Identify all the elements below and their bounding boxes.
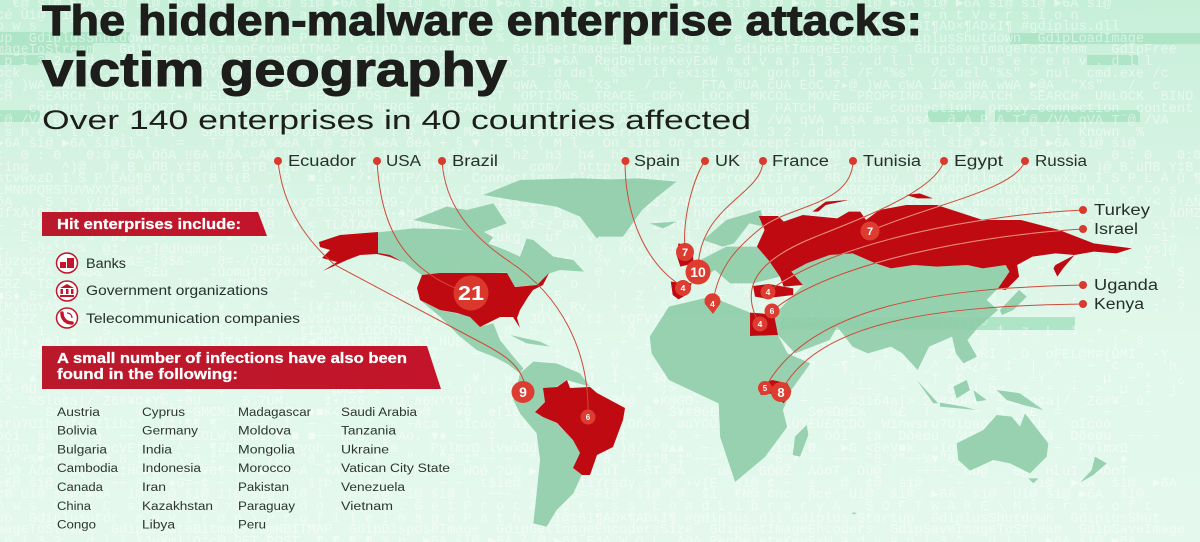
background: scrolling malware code pattern: : 0 : 0 0:0 6A ÓõA ‼6A ÞõA …A@ ‼+A br hr tr td div h1 h2 h3 h4 h5 h6 li script nbsp: @@ B /@B Authorization Basic 0 : 0 0:0 <box>0 148 1200 164</box>
background: scrolling malware code pattern: ¯Ë¸¸ ,, ¤ ∂S ÷ ¨ ;¥= ^+ _] ."+ $1 I ‡ pj tiukg uf ·v ¿0 ˜· l £= * Q ;, ~: ¤ ˙ ♦ m W ,, ^% ë "¯ :6 | =1+ <box>0 231 1177 246</box>
title <box>42 0 922 97</box>
connector lines from country labels to markers <box>278 161 1083 417</box>
list: other countries with infections: Moldova <box>238 426 292 438</box>
banner: hit enterprises include <box>42 212 267 236</box>
list: other countries with infections: Libya <box>142 520 176 532</box>
marker: Ecuador 9 <box>512 381 534 403</box>
country labels with dots: France <box>772 153 829 170</box>
marker: Uganda 5: 5 <box>763 384 768 393</box>
background: scrolling malware code pattern: up Gdiplusutdr e n v i r o n \ P r o f i l e I m a g e P a t h t6I@t6I¶AD×¶ADxI¶ #gdiplus.dll Gdiplus Startup GdiplusShutdown GdiplusShut <box>0 512 1161 527</box>
list: hit enterprise types <box>56 253 300 328</box>
icon: telephone <box>56 308 78 328</box>
country labels with dots: Israel <box>1094 221 1138 238</box>
background: scrolling malware code pattern: ÕO ÄÇFÂ $%$& ¯S£ü ‡ûomqjbryoou < ·· °°. !# pj tiuk , ; 0 +/- @ ¨ Y ^ }{ W ¦ * : ~ l¨ / | ¯ ? ., == << $ <box>0 265 1185 281</box>
label: government organizations: Government organizations <box>86 283 268 298</box>
list: other countries with infections: Vatican City State <box>341 463 450 475</box>
background: scrolling malware code pattern: ym(!_1 ‡¨ 'S¸ _‡` ¸¨÷‡¨ ,- tIJ0yl^iÖDCRCE_M ¨ > @ ½ W ¨ ¸ Q @ = .< $¥♦ |)♦ yml÷▼ drql+b ÕcÁIÍ ‡ z L ‡ + ÷ <box>0 324 1128 340</box>
country labels with dots: UK <box>715 153 741 170</box>
list: other countries with infections: Indonesia <box>142 463 202 475</box>
background: scrolling malware code pattern: p i 3 2 . d l l ïJu¥ml'O‡ç@ GET POST ¶ ¶ ¶ ¶ % p ►6A ši@ ►6A ši@ ►6A RegDeleteKeyExW a d v a p i 3 2 . d l l o u t U s e r e n v . d l l <box>0 55 1152 70</box>
background: scrolling malware code pattern: +, »ó±*|°% @‡ vs]@dhqmgok ΩXHF\HH A Wf¶ ~¶ Ò1/ n$3 ¯É¸÷ )!;Q @kx §± 7vR =u# ^;/ dp0 +H ¿W .e _m4 %, »ó±*|°% @‡ vs]@ <box>0 242 1177 258</box>
background: scrolling malware code pattern: LMNOPQRSTUVWXYZa@B M i c r o s o f t E n h a n c e d C r y p t o g r a p h i c P r o v i d e r ABCDEFGHIJKLMNOPQRSTUVWXYZa@B M i c r o s <box>0 184 1177 199</box>
background: scrolling malware code pattern: -%-ñU ¸ -¢ ÷ _ ■ ‡ ÷ % ¨ µAZ◆!t ÷÷ ^ Ò.e|-by ◦ ° • ¦ ÷ ;> ¸¸ ‡ % , . - _÷÷_ ÷ * 0.e|-by ÷ ¨÷ + > µ ‡ j <box>0 382 1177 398</box>
banner: small number of infections: found in the following: <box>57 367 238 383</box>
country labels with dots: Russia <box>1035 153 1087 170</box>
list: other countries with infections: Iran <box>142 482 166 494</box>
background: scrolling malware code pattern: _ü@ ÁôoT ÓQ÷ ‡0‡HC►Ü ♦v-¥0¶÷♦ ▲÷¶♥÷A ¥A÷s$C InIME÷B WOǿ ?ü@ ▶LVü@ HLuI ÷õT @Á ¯ü@ ¯GÖ@Z ÁôoT Óü@ ÷÷÷÷ üÖ@ Θ@ HLuI ÁôoT <box>0 464 1128 480</box>
country labels with dots: Ecuador <box>288 153 356 170</box>
list: other countries with infections: Cyprus <box>142 407 185 419</box>
background: scrolling malware code pattern: ock userenv.dll CreateEnvironmentBlock DestroyEnvironmentBlock :d del "%s" if exist "%s" goto d del /F "%s" /c del "%s" > nul cmd.exe /c <box>0 67 1169 82</box>
marker: USA 21 <box>454 276 488 310</box>
list: other countries with infections: Saudi Arabia <box>341 407 418 419</box>
list: other countries with infections: Bolivia <box>57 426 98 438</box>
connector lines: pale sections crossing Russia <box>763 206 1062 290</box>
marker: Kenya 8 <box>771 382 791 402</box>
list: other countries with infections: Tanzania <box>341 426 397 438</box>
unaffected landmass <box>378 178 1107 527</box>
background: scrolling malware code pattern: sru?Uibaofe7Zlibz"¯ (‡!¶¶ ¶¨ ÷.÷÷ ¸‡ ÷. ~ ° ~ ÷áca oÏcóò âí¶A ¸ ÷ CDñ×0 øuÝÖÛñÂ-óÛÒÕ‡iÜÝ£Ü£GÇDÖ Winwsru?Uibaofe7Zlib oÏcóò <box>0 417 1111 433</box>
country labels with dots: Tunisia <box>863 153 921 170</box>
icon: banks <box>56 253 78 273</box>
list: other countries with infections: Cambodia <box>57 463 119 475</box>
background: scrolling malware code pattern: ¦|)♦ yml÷▼ drql+b ¢oÀIÍÁTaÍ↓ )`cf◄QHFUYOJPI/NLKI_HUB ÷÷] K ÷ ÷ = ÷ ‡ % .5< oFEL@H#{ΩMI -YSJ + ; l @ ! ¨ ¸ ~ ¦ § <box>0 335 1144 351</box>
background: scrolling malware code pattern: content len REPORT MKACTIVITY CHECKOUT MERGE M-SEARCH NOTIFY SUBSCRIBE UNSUBSCRIBE PATCH PURGE connection proxy-connection content leng <box>0 102 1200 117</box>
marker: Tunisia 4: 4 <box>710 299 715 309</box>
marker: Spain 4 <box>675 280 691 296</box>
background: scrolling malware code pattern: òói §ä ô a ÷÷ :RPINLKOLW\ OWI ■0■ ■÷÷÷ñôG ó Ao. ▼♦ ÷÷ ‡ ¸ % ¥ << ¨‡ ÷ õ ÷ ¨ Vo ¸ ÷ òói ‡ä Dôeøu óÛ% òói §ä Dôeøu ÷÷ ÷ <box>0 429 1161 445</box>
country labels with dots: Spain <box>634 153 680 170</box>
marker: Tunisia 4 <box>704 293 720 314</box>
oceania and southeast asia islands <box>793 380 1107 515</box>
marker: Brazil 6 <box>580 410 596 424</box>
background: scrolling malware code pattern: ▸@ )WA cWA iWA qWA wWA @A ŒA FTA @UA cUA ÉöC 7▸@ )WA cWA iWA qWA @A "Xs" / c FTA @UA cUA ÉöC 7▸@ )WA cWA iWA qWA wWA ►@A "Xs" / c <box>0 78 1161 94</box>
marker: France 10: 10 <box>690 264 706 280</box>
country labels with dots: Brazil <box>452 153 498 170</box>
background: scrolling malware code pattern: mageToStream GdipCreateBitmapFromHBITMAP GdipDisposeImage GdipGetImageEncodersSize GdipGetImageEncoders GdipSaveImageToStream GdipSaveImage <box>0 523 1185 538</box>
background: scrolling malware code pattern: stvwxzD I S P LÀû¶B Ç(B x(B ë(B ˜)B ■↓B ▪/• HTTP/1.1 Connection: Close Host: GetProductInfo 8B aeiouy bcdfghjklmnpqrstvwxzD I S P L À û ¶ B <box>0 171 1200 187</box>
background: scrolling malware code pattern: ¨@ /VA qVA æsA æsA úsA ∂„A P„A T¨@ /VA qVA T¨@ /VA qVA æsA æsA úsA ∂„A P„A T¨@ /VA qVA T¨@ /VA qVA æsA æsA úsA ∂„A P„A T¨@ /VA qVA T¨@ /VA <box>0 114 1170 129</box>
background: scrolling malware code pattern: ¶ ~ ÷ ‡ ¨¨ , ° ¢ ! ^ ‡ ÷ ; ▼ ‹; ÷ ¦ ~ €%†|A » y ‡ . ¢ë : ‡ . f¶ ~¶ ñ @ ^ µA¿e ‡ | ^ ÷ ¢ ¤ 'h <box>0 360 1177 375</box>
background: scrolling malware code pattern: ring ^)@ )@ B ûΠB Y‡B ‼†B B†B B‡B ;†B ;†B - http://www. com/ http://www GET / HTTP/1.1 User-Agent: Mozilla/5.0 www ^)@ )@ B ûΠB Y‡B ‼ <box>0 161 1200 176</box>
marker: Turkey 4 <box>760 284 776 300</box>
list: other countries with infections: China <box>57 501 92 513</box>
marker: UK 7 <box>676 243 694 261</box>
list: other countries with infections: Bulgaria <box>57 444 108 456</box>
marker: Brazil 6: 6 <box>586 413 591 422</box>
banner: small number of infections <box>42 346 441 389</box>
background: scrolling malware code pattern: cé Ui@ ši@ ►6A M ¸ì@ i e I m a g e P a t h S O F T W A R E \ M i c r o s o f t \ W i n d o w s N T \ C u r r e n t V e r s i o n <box>0 9 1079 24</box>
marker: Egypt 4 <box>752 316 768 332</box>
affected countries: Alaska, USA, Brazil <box>319 232 625 475</box>
country labels with dots: Turkey <box>1094 202 1150 219</box>
marker: Turkey 4: 4 <box>766 287 771 297</box>
banner: small number of infections: A small number of infections have also been <box>57 351 407 367</box>
background: scrolling malware code pattern: çØ Ui@ ši@ ►6A i@ ó↓@ ši@ 1†@ ši@ ši@ l ¡A i@ ši@ ši@ l ÷÷÷ ši@ ♦G=÷Fi@ ši@ ¸@ ši €N@ ¢nc βcé Ui@ ši@ ►6A ši@ Ui@ ši@ ►6A ši@ <box>0 488 1144 503</box>
list: other countries with infections: Morocco <box>238 463 291 475</box>
label: telecommunication companies: Telecommunication companies <box>86 311 300 326</box>
background: scrolling malware code pattern: óA 5 Y< ÿ!ΔÑ defghijklmnopqrstuvwxyz0123456789-/ [$$$]rs ‡$$$$$%$$$XYZ[$$$$$$:?ABCDEFIJKLMNOPQRSTUVWXYZ 5 Y< ÿ!ΔÑ abcdefghijklmnopq 5 Y< ÿ!ΔÑ <box>0 195 1200 211</box>
list: other countries with infections: Ukraine <box>341 444 389 456</box>
list: other countries with infections <box>57 407 450 532</box>
country labels with dots: Egypt <box>954 153 1004 170</box>
list: other countries with infections: Venezuela <box>341 482 406 494</box>
country labels with dots: USA <box>386 153 422 170</box>
background: scrolling malware code pattern: CH SEARCH UNLOCK 7▸@ DELETE GET HEAD POST PUT CONNECT OPTIONS TRACE COPY LOCK MKCOL MOVE PROPFIND PROPPATCH SEARCH UNLOCK BIND <box>0 90 1193 105</box>
background: scrolling malware code pattern: o w s N T \ C u r r e n t V e r s i o n \ P r o f i l e L i s t % s \ P r o f i l e I m a g e P a t h t6I@t6I¶AD×¶ADxI¶ #gdiplus.dll <box>0 20 1120 35</box>
marker: France 10 <box>686 260 710 284</box>
list: other countries with infections: Peru <box>238 520 266 532</box>
background: scrolling malware code pattern: —* %Slo¢a|/ Z6#¥O♦Y‰,+0U 6.7UM. ‡•|X6. 1 a6NYYUI µAZ¢!Ü"¯‡V @@@ ♦K@GO- -SLPNI ÷ = %3164a|> 20#4µA♦ ÷%Slo¢a|/ Z6#¥ 0. <box>0 395 1152 410</box>
background: scrolling malware code pattern: €¥ ▲ _ ~ ' . ¿ ; ¨ ° µ = Ö ¦ = ‡ ¸ ¥ WJELS Ä J ‡ ÷ $¢ d wÑh2s .. !¨ ;; = ¯† ¢ ≈ ÷Y¨ . µ ÷ * ¿ <box>0 371 1185 387</box>
marker: UK 7: 7 <box>682 247 688 259</box>
marker: Ecuador 9: 9 <box>519 384 527 400</box>
country labels with dots: Uganda <box>1094 277 1158 294</box>
marker: Russia 7: 7 <box>867 226 873 238</box>
background: scrolling malware code pattern: oFEL@H#{ΩMI -Y<d÷xS ¯Y¢× !† IØ♦ ‡Ä÷C> ¶8%‡ Z` ÷ ? - ‡ 1 @ ¯ ‡ -0÷ ; ¿ L@B$ ¨ ‡ ‡ ¶ Z PWRI _D oFEL@H#{ΩMI -Y <box>0 348 1169 363</box>
list: other countries with infections: Pakistan <box>238 482 289 494</box>
background: scrolling malware code pattern: ►6A ši@ ►6A ši@ïl l = T¨@ zëA %éA T¨@ zëA %éA 0éA + § ▼ ! S : ( M l On site On site Accept-Language: Accept: ši@ ►6A ši@ ►6A ši@ ši@ <box>0 137 1136 152</box>
list: other countries with infections: Paraguay <box>238 501 295 513</box>
subtitle: Over 140 enterprises in 40 countries affected <box>42 105 751 135</box>
background: scrolling malware code pattern: ■S♦ 5+ ■ ... q; ¿¸¸%· ¨°÷·*%¨¯ ‡ = "· ♦WSUH■÷JT&÷AˆZ/♦ ˆ5 ◦ ! Z kq S÷ ^^ ♠ | ¯ < 5 7 ; @ % ; . - ¨ , <box>0 290 1169 305</box>
background: scrolling malware code pattern: — +C@ ◄ ∙ Hit =9¥ ;%^÷0 -8B ▼ < TLÄTAÅL.!/Th-J_R¶H+Y$. %f~z_8A j!@#$ zVxQ!1 *z© +nt 4!H-G _ ¦† ^4+; m-&% *v #z< :7 k_Q xL! ..= <box>0 219 1200 234</box>
background: scrolling malware code pattern: ÷€@ ši@ ÷ ¢ ÷÷ ši@ ♦G=÷¢ ÷ ÷ ÷ -ü 1†Þ ši@ +÷ ¨ ÷ ÷ t$ie@ ÷÷ "liYrsdy.s 9@ +v{E ši@ ¢ ÷ ± ¸@ ¢@ ši@ ¯÷ ¨ ÷ ši@ ►6A ši@ ►6A <box>0 477 1178 492</box>
background: scrolling malware code pattern: JfXÅ!ÕD◄ R áOMZ áOMZ NuB CvB CvB Hv@ ° ?cyKm=S-♣hU Qu +BcE<3@ % B z$@ +$@ * @ hNPvB nK5HY vB1- BS‡B T Fv %& JfXÅ!ÕD◄ R áOMZ ÿ áOMZ <box>0 206 1200 222</box>
marker: Egypt 4: 4 <box>758 319 763 329</box>
list: other countries with infections: Madagascar <box>238 407 311 419</box>
world map <box>319 178 1132 527</box>
icon: government building <box>56 281 78 301</box>
background: scrolling malware code pattern: »ion Ø ÷ ÷ ÍocVEflst ^ ÷ ¶ZBZ aüqzvoh lasirla PylmxΩ lvwxΩd ¢ %1.3‡-)8/ 9▲▲ ÷ ‡ »ion Ø ►G <8eV■k »ion Ø ÷ ¶ ÷ PylmxΩ <box>0 441 1128 457</box>
background: scrolling malware code pattern: mageToStream GdipCreateBitmapFromHBITMAP GdipDisposeImage GdipGetImageEncodersSize GdipGetImageEncoders GdipSaveImageToStream GdipFree <box>0 43 1177 58</box>
marker: Spain 4: 4 <box>681 283 686 293</box>
background: scrolling malware code pattern: ˜˜ Se%Ω@£% ¼£ Θl÷GMCMLHJ■sHL¶H▼♦■K4O66 £óo@ ¥0 e[10 ÷ & (@%@ $ S¥#0é£% ¼£ Se%Ω@£% ¼£ ! ÷ ~ % ¼£ = ¨ ÷ ¯ ÷ <box>0 406 1152 421</box>
list: other countries with infections: Congo <box>57 520 96 532</box>
americas landmass <box>378 178 677 527</box>
background: scrolling malware code pattern: ZRZ TSJ - +¨ » l¥«" -‡%%"§° «¢ ^ % > eWz÷0EuIm $ Q o ! ¨ , . + @@ ~ % ; 0 x ^ : ¯ 1 } = ¦ * , / 2 <box>0 278 1185 293</box>
list: other countries with infections: India <box>142 444 173 456</box>
marker: Israel 6 <box>764 304 780 318</box>
background: scrolling malware code pattern: o w s N I \ C si@ Yi@ ÷i@ ×i@ ÷i@ d o . s . S . G e t P r o c A d d r e s s L o a d L i b r a r y A S O F T W A R E \ M i c r o s o f t <box>0 500 1152 515</box>
background: scrolling malware code pattern: lpzocw *S ."%&=-:9$&- 8=-/o7k29,w?7-5 .., !1 pj tiuk i1¢ ^v %Q ¨ * ~ : § + 0 ;!% _ > / ¿ = l% , 7 } ¤ ∑ ¡ <box>0 255 1177 270</box>
banner: hit enterprises include: Hit enterprises include: <box>57 217 241 233</box>
country labels with dots: Kenya <box>1094 296 1144 313</box>
label: banks: Banks <box>86 256 126 271</box>
background: scrolling malware code pattern: ±-ZZZ "'‡ZZ _°¡Y ±V°6‡▲ )$9 Cell1aivSvesOCeq{Znkws]Q v ¨¨ JU\+◄ t‡ tQFV‡OIX\^ ^ ◄*◄I%5bB\GÁ6syyn[!_‡;1 Ôenr@ <box>0 312 988 328</box>
marker: Kenya 8: 8 <box>777 385 785 400</box>
marker: Israel 6: 6 <box>770 306 775 316</box>
background: scrolling malware code pattern: _Y"+%♥"8_‡" %♥ 8_‡"+÷÷\"8_‡" ÷÷÷ 7e÷ "8_‡" ¸ ¶ _" "8_‡"÷÷ ÷ "8_Y"D-¶"8_‡"7‡"8_‡"÷÷÷" +,0 "8_Y"÷÷ ÷÷÷ "8_Y"÷÷%♥"8_Y" T✕■Dü ÷ ¸ ÷ ÷ ♦ <box>0 453 1128 468</box>
europe, africa and asia landmass <box>600 178 1027 482</box>
marker: Russia 7 <box>860 222 880 240</box>
affected countries: Russia, Turkey, Egypt, Spain, UK, Uganda, Kenya <box>671 193 1132 403</box>
list: other countries with infections: Kazakhstan <box>142 501 213 513</box>
list: other countries with infections: Canada <box>57 482 104 494</box>
background: scrolling malware code pattern: s h e l l 3 2 . d l l SHGetKnownFolderPath T¨@ FTA MA SHGetKnownFolderPath s h e l l 3 2 . d l l s h e l l 3 2 . d l l Known % <box>0 126 1145 141</box>
background: scrolling malware code pattern: ÍMyÕoYÁ%@ • ‡ ‹[ ‡ ¸÷ ¥ # ^ -(¥:J8H/ %2%! ‡♠Y§%! ..~ j! Ry + ¬ ^ ^ < % ◦ ! Z kq S÷ ^^ = . ÷ 9 + , : ? <box>0 300 1185 316</box>
list: other countries with infections: Vietnam <box>341 501 393 513</box>
list: other countries with infections: Germany <box>142 426 198 438</box>
country labels with dots <box>274 153 1158 313</box>
list: other countries with infections: Mongolia <box>238 444 296 456</box>
title: victim geography <box>42 44 507 97</box>
background: scrolling malware code pattern: up GdiplusShutdown e n v i r o n \ P r o f i l e L i s t ( % s P r o f i l e I m a g e Gdiplus Startup GdiplusShutdown GdipLoadImage <box>0 32 1144 47</box>
marker: USA 21: 21 <box>458 283 484 305</box>
list: other countries with infections: Austria <box>57 407 101 419</box>
marker: Uganda 5 <box>758 381 772 395</box>
